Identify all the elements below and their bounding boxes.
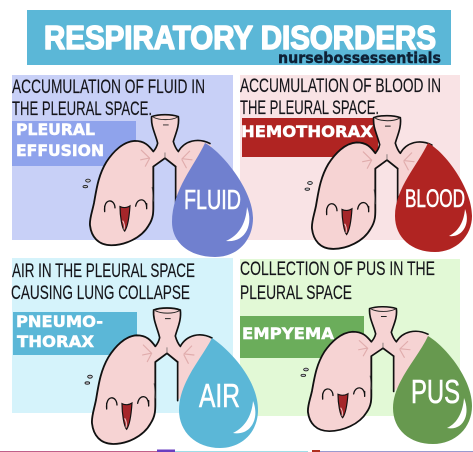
lung with blood drop — [305, 116, 472, 252]
description: hemothorax: THE PLEURAL SPACE. — [240, 98, 379, 119]
label: pleural effusion: EFFUSION — [16, 141, 104, 160]
drop: fluid — [172, 143, 253, 257]
label: pneumothorax — [13, 312, 137, 355]
title: RESPIRATORY DISORDERS — [44, 19, 436, 56]
watermark: nursebossessentials — [278, 49, 441, 67]
drop: blood — [395, 143, 472, 252]
drop label: air: AIR — [199, 377, 240, 414]
label: pleural effusion — [12, 120, 136, 166]
lung with fluid drop — [83, 115, 253, 257]
description: pneumothorax: CAUSING LUNG COLLAPSE — [11, 283, 190, 304]
highlight — [447, 398, 467, 428]
panel: pleural effusion — [12, 75, 233, 240]
description: pneumothorax: AIR IN THE PLEURAL SPACE — [12, 261, 195, 282]
panel: empyema — [240, 259, 460, 416]
lung with pus drop — [301, 307, 472, 444]
drop: air — [179, 338, 258, 448]
label: pleural effusion: PLEURAL — [16, 120, 95, 139]
lung with air drop — [85, 308, 258, 448]
label: empyema: EMPYEMA — [242, 324, 335, 343]
label: hemothorax: HEMOTHORAX — [241, 122, 374, 141]
label: hemothorax — [241, 118, 378, 157]
header banner — [27, 10, 451, 67]
description: pleural effusion: THE PLEURAL SPACE. — [12, 99, 152, 120]
label: pneumothorax: THORAX — [17, 332, 95, 351]
highlight — [233, 401, 255, 433]
description: pleural effusion: ACCUMULATION OF FLUID IN — [12, 77, 205, 98]
highlight — [226, 207, 249, 241]
drop: pus — [393, 336, 472, 444]
highlight — [449, 209, 467, 236]
label: pneumothorax: PNEUMO- — [16, 312, 103, 331]
drop label: fluid: FLUID — [184, 184, 241, 215]
panel: pneumothorax — [11, 258, 233, 413]
description: empyema: PLEURAL SPACE — [240, 283, 352, 304]
panel: hemothorax — [240, 75, 460, 240]
label: empyema — [240, 316, 364, 358]
